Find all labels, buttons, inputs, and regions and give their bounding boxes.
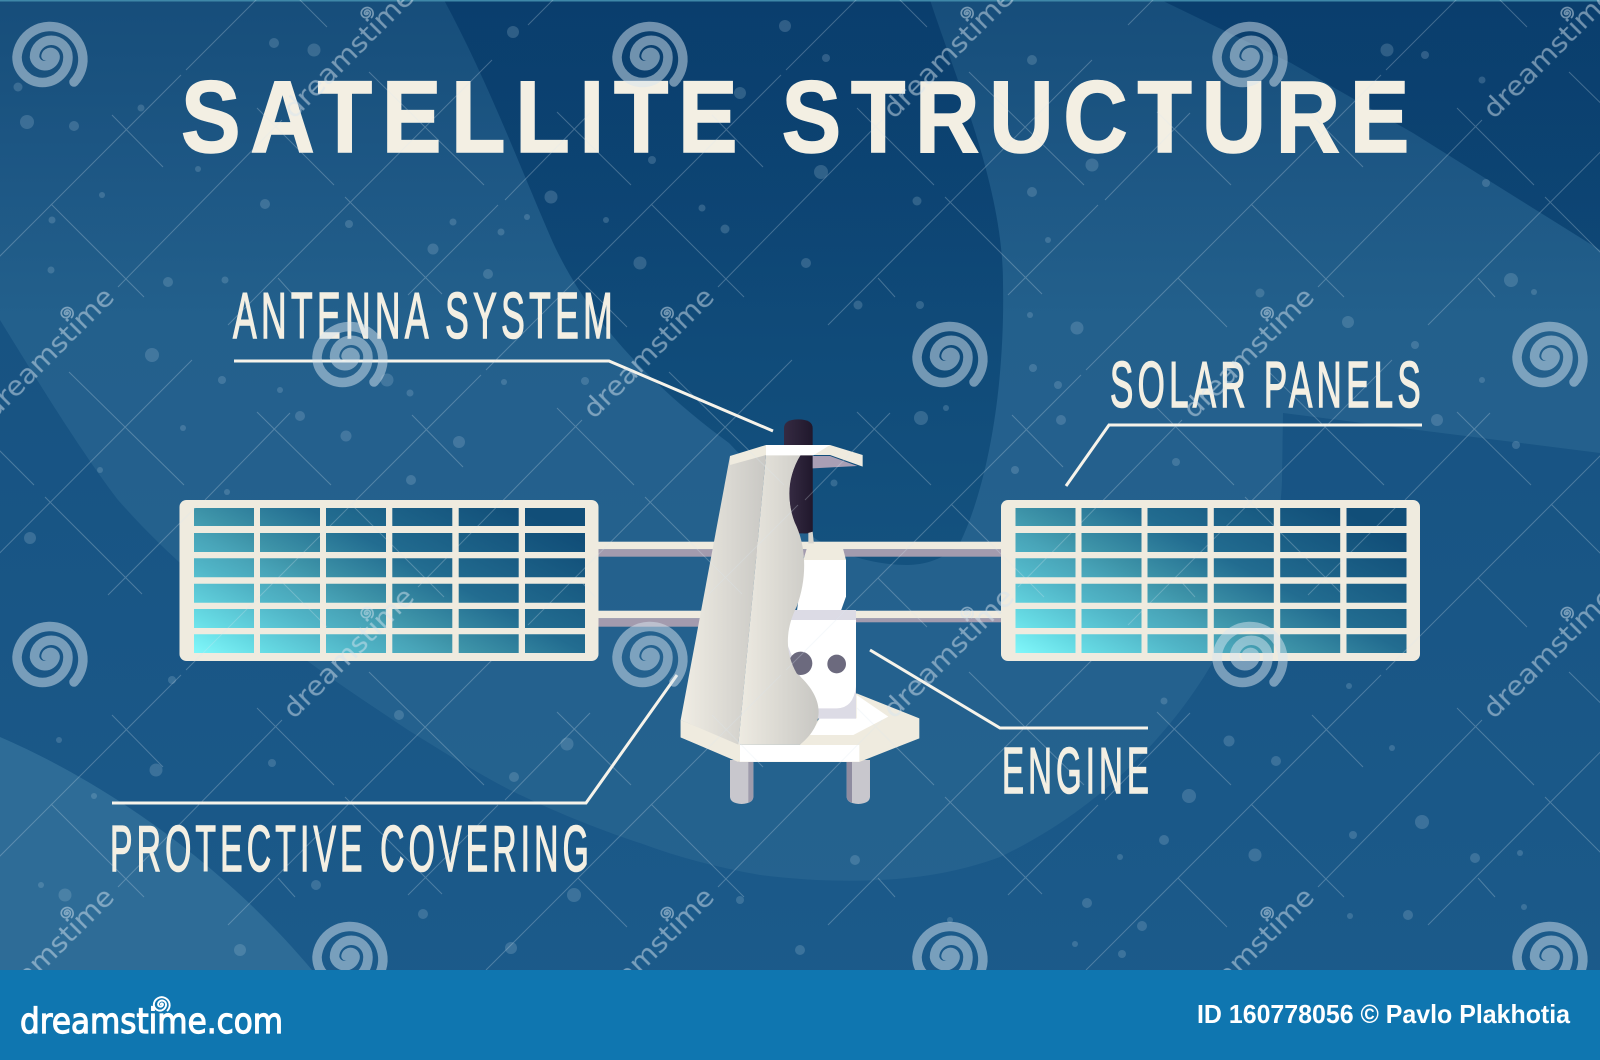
top tray	[730, 445, 863, 468]
panel: left solar panel	[180, 500, 598, 661]
label: antenna system: ANTENNA SYSTEM	[233, 279, 617, 352]
arm: solar panel struts	[596, 542, 1006, 627]
watermark wordmarks: dreamstime	[277, 581, 421, 725]
watermark wordmarks: dreamstime	[877, 581, 1021, 725]
watermark wordmarks: dreamstime	[577, 281, 721, 425]
leader line: protective covering	[112, 675, 677, 803]
rod collar	[808, 532, 814, 545]
protective covering	[681, 455, 819, 762]
watermark wordmarks: dreamstime	[1177, 281, 1321, 425]
title: SATELLITE STRUCTURE	[181, 60, 1419, 174]
footer logo wordmark: dreamstime.com	[20, 1002, 283, 1042]
satellite body	[681, 419, 919, 804]
footer credit: ID 160778056 © Pavlo Plakhotia	[1197, 999, 1571, 1029]
antenna rod	[784, 419, 813, 533]
label: protective covering: PROTECTIVE COVERING	[110, 812, 593, 885]
legs	[730, 760, 870, 804]
label: engine: ENGINE	[1002, 734, 1153, 807]
panel: right solar panel	[1001, 500, 1420, 661]
engine block	[785, 610, 856, 719]
watermark wordmarks: dreamstime	[1177, 881, 1321, 1025]
leader line: antenna system	[234, 361, 773, 431]
leader line: solar panels	[1066, 425, 1422, 486]
footer logo spiral	[154, 997, 170, 1011]
base platform	[681, 693, 919, 762]
leader line: engine	[870, 650, 1148, 728]
watermark wordmarks: dreamstime	[577, 881, 721, 1025]
antenna rod shadow section	[789, 456, 813, 533]
footer bar	[0, 970, 1600, 1060]
upper module	[797, 543, 846, 613]
